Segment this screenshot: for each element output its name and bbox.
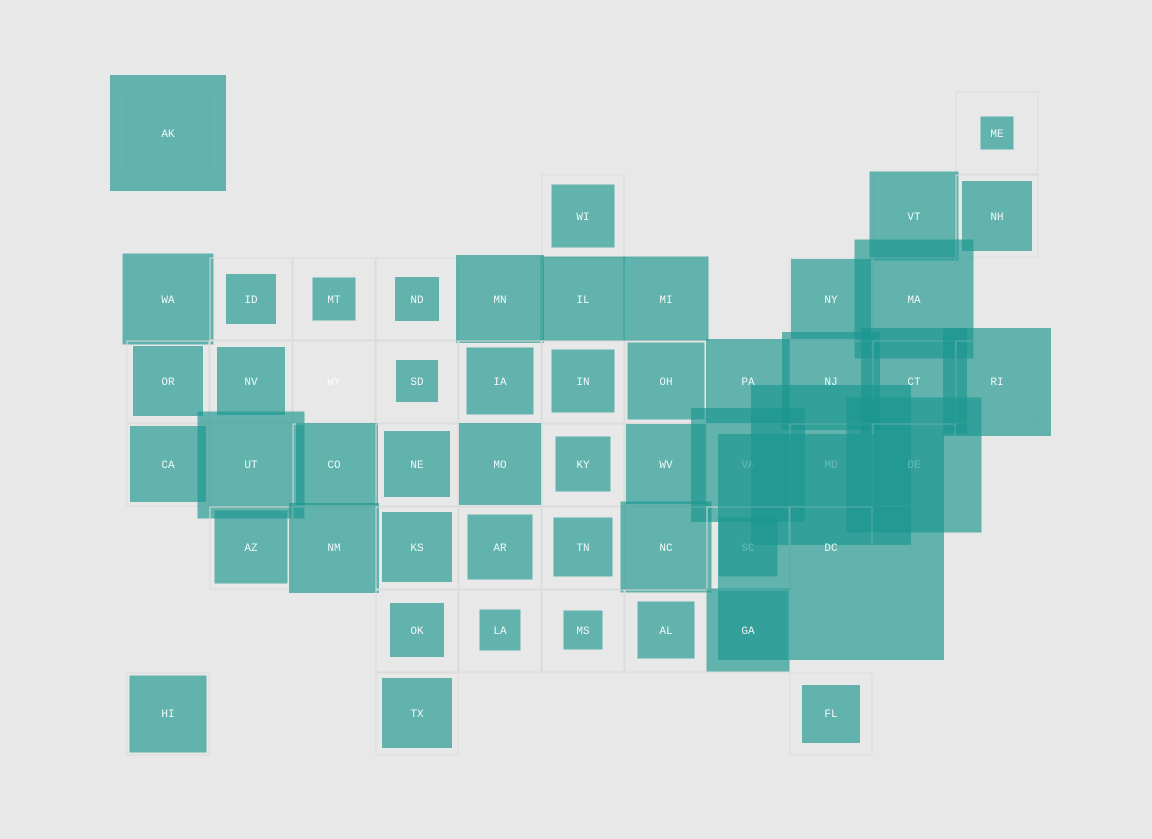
- state: NY: [790, 258, 872, 340]
- state: AZ: [210, 507, 292, 589]
- state: ID: ID: [244, 295, 258, 307]
- state: IL: IL: [576, 295, 590, 307]
- state: HI: HI: [161, 709, 175, 721]
- state: LA: [459, 590, 541, 672]
- state: SD: SD: [410, 377, 424, 389]
- state: WI: WI: [576, 212, 590, 224]
- state: MO: MO: [493, 460, 507, 472]
- state: VT: [870, 172, 958, 260]
- state: AK: AK: [161, 129, 175, 141]
- state: OK: OK: [410, 626, 424, 638]
- state: IA: [459, 341, 541, 423]
- state: ND: ND: [410, 295, 424, 307]
- state: TX: [376, 673, 458, 755]
- state: HI: [127, 673, 209, 755]
- state: NC: NC: [659, 543, 673, 555]
- state: WA: [122, 254, 214, 344]
- state: UT: UT: [244, 460, 258, 472]
- state: VT: VT: [907, 212, 921, 224]
- state: WA: WA: [161, 295, 175, 307]
- state: PA: PA: [741, 377, 755, 389]
- state: OH: OH: [659, 377, 673, 389]
- state: RI: [943, 328, 1051, 436]
- state: MT: [293, 258, 375, 340]
- state: IA: IA: [493, 377, 507, 389]
- state: NC: [620, 502, 712, 592]
- state: MI: [624, 256, 708, 342]
- state: AR: [459, 507, 541, 589]
- state: NE: NE: [410, 460, 424, 472]
- state: MN: [456, 255, 544, 343]
- state: GA: GA: [741, 626, 755, 638]
- state: AL: [625, 590, 707, 672]
- state: KY: KY: [576, 460, 590, 472]
- state: RI: RI: [990, 377, 1004, 389]
- state: NE: [376, 424, 458, 506]
- state: CA: CA: [161, 460, 175, 472]
- state: WV: WV: [659, 460, 673, 472]
- state: DE: [846, 398, 982, 532]
- state: OK: [376, 590, 458, 672]
- state: MT: MT: [327, 295, 341, 307]
- state: OH: [625, 341, 707, 423]
- state: CO: [293, 423, 378, 506]
- state: NH: NH: [990, 212, 1004, 224]
- state: FL: [790, 673, 872, 755]
- state: WI: [542, 175, 624, 257]
- state: OR: OR: [161, 377, 175, 389]
- state: CA: [127, 424, 209, 506]
- state: UT: [198, 412, 304, 518]
- state: MO: [459, 423, 541, 506]
- state: VA: [691, 408, 805, 522]
- state: NJ: NJ: [824, 377, 838, 389]
- state: AL: AL: [659, 626, 673, 638]
- state: MI: MI: [659, 295, 673, 307]
- state: WV: [625, 424, 707, 506]
- state: NV: [210, 341, 292, 423]
- state: DC: [718, 434, 944, 660]
- state: OR: [127, 341, 209, 423]
- state: NM: [289, 503, 379, 593]
- state: MA: MA: [907, 295, 921, 307]
- state: KY: [542, 424, 624, 506]
- state: VA: VA: [741, 460, 755, 472]
- state: AR: AR: [493, 543, 507, 555]
- state: TN: TN: [576, 543, 590, 555]
- state: IL: [540, 256, 626, 342]
- state: PA: [706, 339, 790, 423]
- state: GA: [706, 588, 790, 672]
- state: CT: [861, 328, 967, 434]
- state: TX: TX: [410, 709, 424, 721]
- state: NY: NY: [824, 295, 838, 307]
- state: DC: DC: [824, 543, 838, 555]
- state: MN: MN: [493, 295, 507, 307]
- state: SD: [376, 341, 458, 423]
- state: IN: [542, 341, 624, 423]
- state: ND: [376, 258, 458, 340]
- state: NV: NV: [244, 377, 258, 389]
- state: MD: [751, 385, 911, 545]
- state: WY: WY: [327, 377, 341, 389]
- state: NM: NM: [327, 543, 341, 555]
- state: MA: [854, 240, 974, 358]
- state: CT: CT: [907, 377, 921, 389]
- state: NH: [956, 175, 1038, 257]
- state: AZ: AZ: [244, 543, 258, 555]
- state: KS: [376, 507, 458, 589]
- state: MS: MS: [576, 626, 590, 638]
- state: TN: [542, 507, 624, 589]
- state: LA: LA: [493, 626, 507, 638]
- state: ID: [210, 258, 292, 340]
- state: SC: [707, 507, 789, 589]
- state: CO: CO: [327, 460, 341, 472]
- state: MS: [542, 590, 624, 672]
- state: NJ: [782, 332, 880, 430]
- state: WY: [293, 341, 375, 423]
- state: ME: [956, 92, 1038, 174]
- state: MD: MD: [824, 460, 838, 472]
- state: DE: DE: [907, 460, 921, 472]
- state: IN: IN: [576, 377, 590, 389]
- state: KS: KS: [410, 543, 424, 555]
- state: ME: ME: [990, 129, 1004, 141]
- state: SC: SC: [741, 543, 755, 555]
- state: FL: FL: [824, 709, 838, 721]
- state: AK: [110, 75, 226, 191]
